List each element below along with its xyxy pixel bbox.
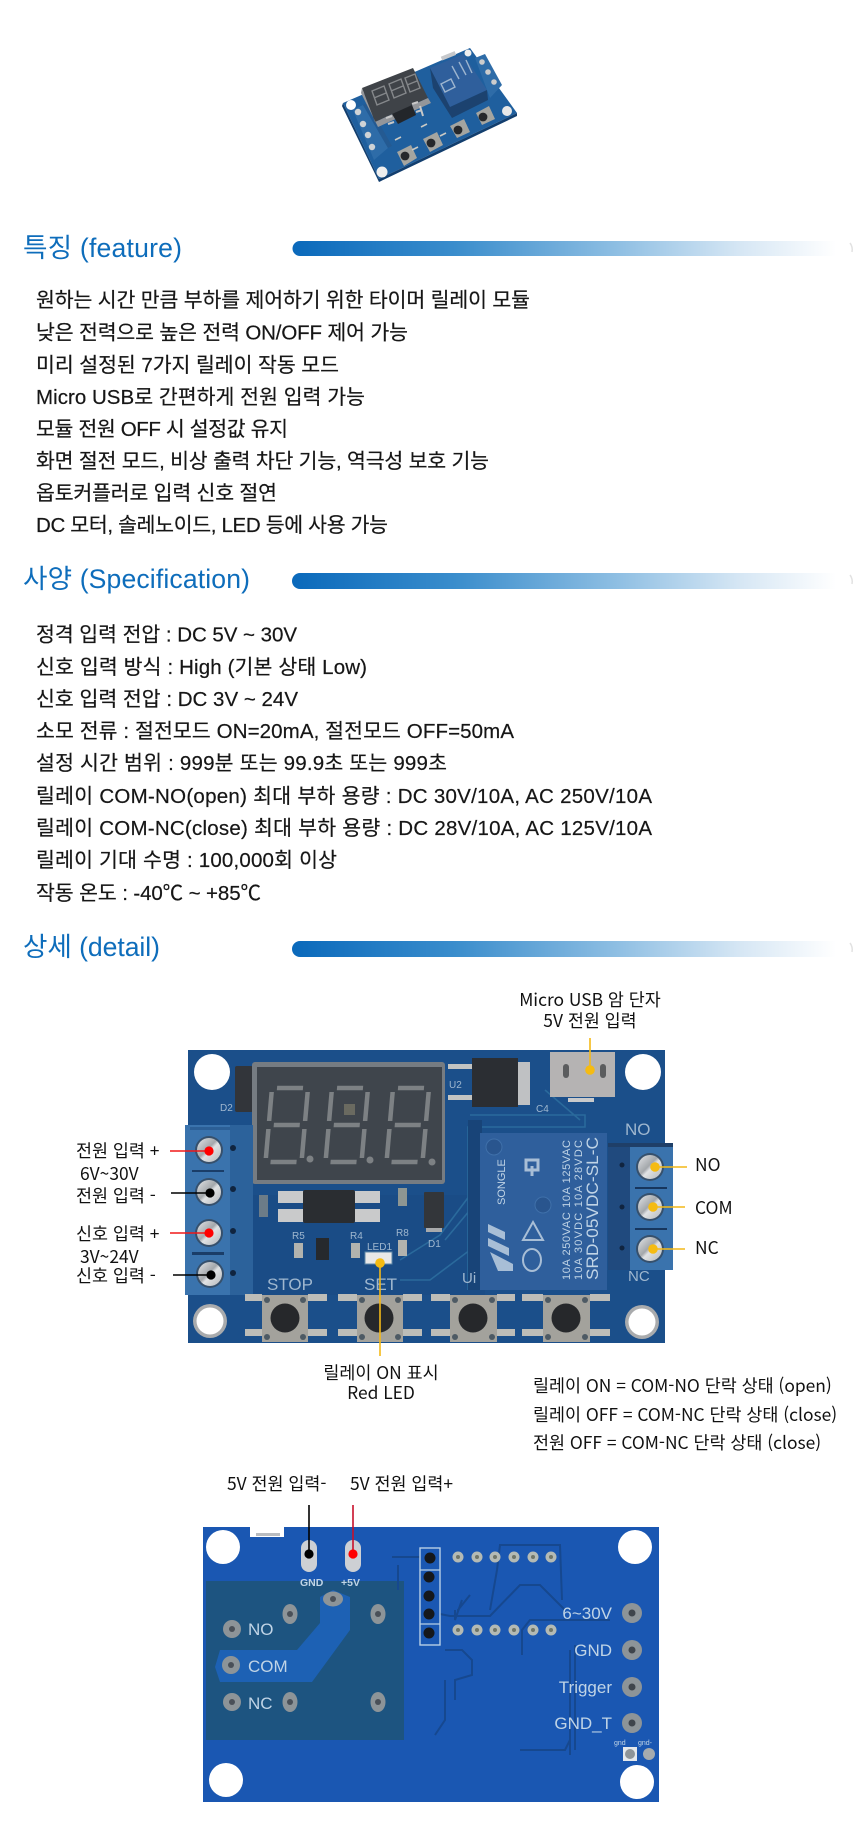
relay contact labels	[248, 1620, 288, 1713]
diode D2	[220, 1066, 253, 1114]
left terminal block	[185, 1125, 253, 1295]
callout: micro usb	[519, 987, 661, 1075]
text block: specification list: 신호 입력 방식 : High (기본 상태 Low)	[36, 656, 367, 679]
heading: detail: 상세 (detail)	[23, 932, 160, 962]
relay: SRD-05VDC-SL-C	[583, 1137, 602, 1280]
text block: specification list	[36, 624, 652, 905]
input terminal labels and pads: GND_T	[554, 1714, 612, 1733]
holes	[206, 1530, 654, 1799]
callout: signal input minus	[76, 1263, 216, 1288]
text block: feature list: 옵토커플러로 입력 신호 절연	[36, 482, 277, 505]
text block: specification list: 소모 전류 : 절전모드 ON=20mA, 절전모드 OFF=50mA	[36, 720, 514, 743]
callout: relay on led: Red LED	[347, 1380, 415, 1405]
input terminal labels and pads: GND	[574, 1641, 612, 1660]
callout: 5V input minus	[227, 1471, 326, 1559]
text block: specification list: 작동 온도 : -40℃ ~ +85℃	[36, 882, 261, 905]
callout: 5V input minus: 5V 전원 입력-	[227, 1471, 326, 1496]
relay	[480, 1133, 607, 1290]
small gnd pads	[614, 1740, 655, 1761]
callout: 5V input plus: 5V 전원 입력+	[350, 1471, 453, 1496]
relay: 10A 250VAC 10A 125VAC	[561, 1140, 573, 1280]
text block: specification list: 릴레이 COM-NO(open) 최대 부하 용량 : DC 30V/10A, AC 250V/10A	[36, 785, 652, 808]
diode D2: D2	[220, 1103, 233, 1114]
pcb board back	[203, 1527, 659, 1802]
text block: feature list	[36, 289, 530, 537]
smd parts and silkscreen: LED1	[367, 1242, 392, 1253]
text block: feature list: 화면 절전 모드, 비상 출력 차단 기능, 역극성 보호 기능	[36, 450, 489, 473]
smd parts and silkscreen: R8	[396, 1228, 409, 1239]
text block: feature list: Micro USB로 간편하게 전원 입력 가능	[36, 386, 365, 409]
text block: relay states: 전원 OFF = COM-NC 단락 상태 (close)	[533, 1430, 821, 1455]
callout: signal input plus: 신호 입력 +	[76, 1221, 159, 1246]
product photo: timer relay module	[342, 48, 517, 182]
COM copper area	[215, 1590, 350, 1682]
text block: specification list: 신호 입력 전압 : DC 3V ~ 24V	[36, 688, 298, 711]
callout: signal input minus: 신호 입력 -	[76, 1263, 156, 1288]
callout: relay on led	[323, 1258, 439, 1405]
relay: 10A 30VDC 10A 28VDC	[573, 1140, 585, 1280]
silkscreen button labels: NO	[625, 1120, 650, 1139]
heading: specification: 사양 (Specification)	[23, 564, 250, 594]
callout: NO terminal	[650, 1152, 720, 1177]
smd parts and silkscreen	[259, 1188, 409, 1264]
callout: COM terminal	[648, 1195, 733, 1220]
input terminal labels and pads: Trigger	[559, 1678, 612, 1697]
relay contact labels: NO	[248, 1620, 274, 1639]
text block: feature list: 낮은 전력으로 높은 전력 ON/OFF 제어 가능	[36, 322, 408, 344]
regulator chip U2	[448, 1058, 549, 1115]
solder pads GND and +5V: GND	[300, 1577, 324, 1589]
smd parts and silkscreen: R5	[292, 1231, 305, 1242]
micro usb connector	[550, 1052, 615, 1102]
silkscreen button labels: SET	[364, 1275, 397, 1294]
gradient bar: specification	[292, 573, 852, 589]
relay pins	[222, 1592, 386, 1712]
optocoupler	[278, 1190, 380, 1223]
relay isolation area	[206, 1581, 404, 1740]
silkscreen button labels	[267, 1120, 650, 1294]
right terminal block	[608, 1143, 673, 1270]
mounting holes	[193, 1054, 661, 1339]
callout: relay on led: 릴레이 ON 표시	[323, 1360, 439, 1385]
diagram: back of module	[203, 1527, 659, 1802]
display solder pads	[452, 1552, 556, 1636]
gradient bar: detail	[292, 941, 852, 957]
regulator chip U2: U2	[449, 1080, 462, 1091]
callout: signal input plus: 3V~24V	[80, 1244, 139, 1269]
text block: relay states: 릴레이 ON = COM-NO 단락 상태 (open)	[533, 1373, 832, 1398]
relay contact labels: COM	[248, 1657, 288, 1676]
traces	[392, 1545, 610, 1755]
callout: power input minus	[76, 1183, 215, 1208]
input terminal labels and pads: 6~30V	[562, 1604, 613, 1623]
silkscreen button labels: NC	[628, 1268, 650, 1285]
smd parts and silkscreen: R4	[350, 1231, 363, 1242]
callout: NC terminal: NC	[695, 1235, 719, 1260]
small gnd pads: gnd-	[638, 1740, 653, 1747]
text block: relay states: 릴레이 OFF = COM-NC 단락 상태 (close)	[533, 1402, 837, 1427]
text block: relay states	[533, 1373, 837, 1455]
input terminal labels and pads	[554, 1603, 642, 1733]
text block: feature list: 모듈 전원 OFF 시 설정값 유지	[36, 418, 288, 441]
callout: 5V input plus	[348, 1471, 453, 1559]
callout: micro usb: Micro USB 암 단자	[519, 987, 661, 1012]
callout: NO terminal: NO	[695, 1152, 720, 1177]
pin header	[420, 1548, 440, 1645]
callout: power input minus: 전원 입력 -	[76, 1183, 156, 1208]
text block: feature list: 원하는 시간 만큼 부하를 제어하기 위한 타이머 릴레이 모듈	[36, 289, 530, 312]
callout: power input plus: 전원 입력 +	[76, 1138, 159, 1163]
seven segment display	[252, 1062, 445, 1184]
solder pads GND and +5V: +5V	[341, 1577, 360, 1589]
push buttons	[245, 1294, 610, 1342]
regulator chip U2: C4	[536, 1104, 549, 1115]
callout: COM terminal: COM	[695, 1195, 733, 1220]
relay: SONGLE	[496, 1159, 508, 1205]
callout: power input plus	[76, 1138, 214, 1186]
text block: specification list: 릴레이 기대 수명 : 100,000회 이상	[36, 849, 337, 872]
silkscreen button labels: Ui	[462, 1270, 476, 1287]
solder pads GND and +5V	[300, 1540, 361, 1589]
relay contact labels: NC	[248, 1694, 273, 1713]
text block: specification list: 정격 입력 전압 : DC 5V ~ 30V	[36, 624, 297, 646]
diagram: front of module	[185, 1050, 673, 1343]
diode D1: D1	[428, 1239, 441, 1250]
gradient bar: feature	[293, 241, 852, 256]
diode D1	[424, 1192, 444, 1250]
callout: NC terminal	[648, 1235, 719, 1260]
heading: feature: 특징 (feature)	[23, 233, 182, 263]
callout: signal input plus	[76, 1221, 214, 1269]
silkscreen button labels: STOP	[267, 1275, 313, 1294]
text block: feature list: DC 모터, 솔레노이드, LED 등에 사용 가능	[36, 514, 388, 537]
text block: specification list: 릴레이 COM-NC(close) 최대 부하 용량 : DC 28V/10A, AC 125V/10A	[36, 817, 652, 840]
callout: power input plus: 6V~30V	[80, 1161, 139, 1186]
pcb board front	[188, 1050, 665, 1343]
small gnd pads: gnd	[614, 1740, 626, 1747]
text block: feature list: 미리 설정된 7가지 릴레이 작동 모드	[36, 354, 339, 377]
callout: micro usb: 5V 전원 입력	[543, 1008, 637, 1033]
text block: specification list: 설정 시간 범위 : 999분 또는 99.9초 또는 999초	[36, 752, 447, 775]
